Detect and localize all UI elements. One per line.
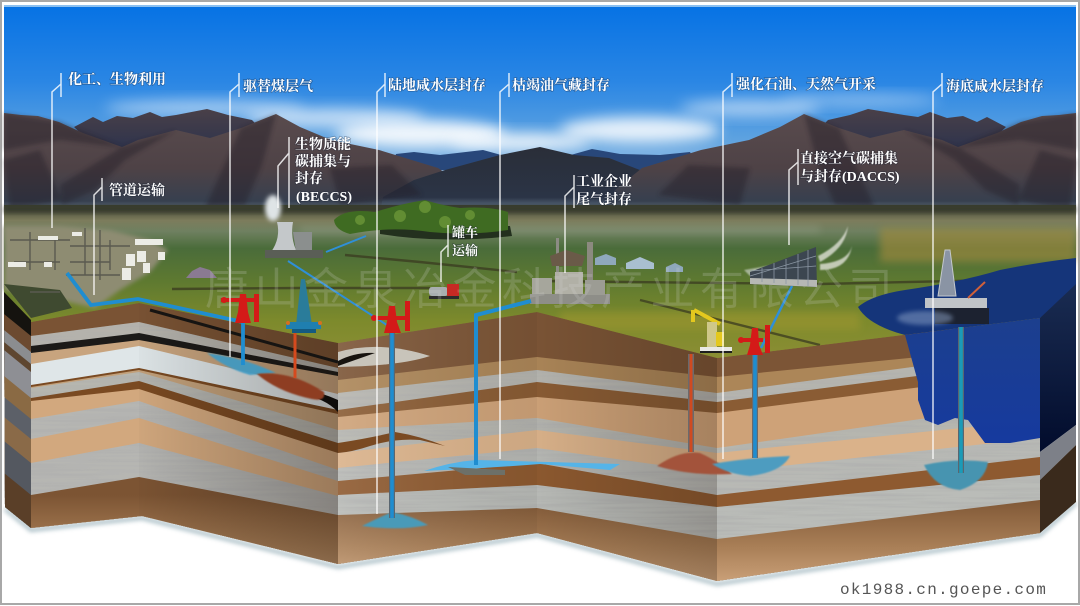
label: 管道运输 [94, 178, 165, 295]
label: 化工、生物利用 [52, 71, 166, 228]
ground plain [4, 205, 1076, 360]
well: depleted reservoir [476, 301, 531, 465]
label: 强化石油、天然气开采 [723, 73, 876, 459]
label: 管道运输: 管道运输 [109, 182, 165, 199]
label: BECCS: 碳捕集与 [295, 153, 351, 170]
label: 驱替煤层气: 驱替煤层气 [243, 78, 313, 95]
label: 枯竭油气藏封存: 枯竭油气藏封存 [512, 77, 610, 94]
label: BECCS [278, 136, 352, 208]
CO2 pipeline from refinery [67, 273, 243, 365]
CO2 transport lines [288, 236, 792, 348]
label: 直接空气碳捕集与封存 [789, 149, 900, 245]
center dark mountain [380, 147, 700, 212]
label: BECCS: 生物质能 [295, 136, 351, 153]
tanker truck [429, 284, 459, 299]
left front strata [31, 303, 338, 564]
label: 罐车运输: 运输 [452, 243, 478, 258]
label: 直接空气碳捕集与封存: 直接空气碳捕集 [800, 150, 898, 167]
ocean surface [858, 258, 1076, 335]
village houses [550, 250, 683, 272]
label: BECCS: 封存 [295, 170, 323, 187]
reservoir: sea saline aquifer [924, 461, 988, 490]
shadow facets [4, 113, 1076, 210]
clouds [105, 94, 940, 151]
tent building [186, 267, 217, 278]
well: coal bed [294, 333, 296, 378]
watermark: 唐山金泉冶金科技产业有限公司 [205, 265, 898, 314]
reservoir: saline aquifer land [362, 512, 428, 528]
back right ridge [780, 109, 1006, 170]
back left ridge [74, 109, 300, 170]
label: 海底咸水层封存 [933, 73, 1044, 459]
label: 驱替煤层气 [230, 73, 313, 357]
distant snow mountains [390, 149, 700, 170]
label: 工业企业尾气封存: 工业企业 [576, 173, 632, 190]
website caption: ok1988.cn.goepe.com [840, 581, 1047, 599]
right end face [1040, 284, 1076, 533]
label: BECCS: (BECCS) [296, 190, 352, 205]
front right range [605, 113, 1076, 214]
wells and pipelines [67, 273, 961, 518]
well: enhanced gas blue [752, 355, 758, 458]
geological block [4, 284, 1076, 600]
label: 陆地咸水层封存: 陆地咸水层封存 [388, 77, 486, 94]
mountains [4, 109, 1076, 214]
cooling tower BECCS [265, 195, 323, 258]
label: 陆地咸水层封存 [377, 73, 486, 514]
left end face [4, 290, 32, 540]
wellhead 3 [738, 325, 770, 355]
reservoir: red coal [257, 373, 324, 400]
label: 强化石油、天然气开采: 强化石油、天然气开采 [736, 76, 876, 93]
label: 工业企业尾气封存 [565, 173, 632, 273]
label: 罐车运输 [441, 225, 478, 282]
label: 海底咸水层封存: 海底咸水层封存 [946, 78, 1044, 95]
bottom shadow [5, 503, 1076, 584]
pumpjack [693, 310, 732, 353]
sky [4, 5, 1076, 175]
offshore rig [897, 250, 989, 325]
tree patch [334, 200, 512, 240]
refinery complex [4, 226, 168, 318]
wellhead 2 [371, 301, 410, 333]
industrial plant [530, 238, 610, 304]
label: 罐车运输: 罐车 [452, 225, 478, 240]
well: land saline [389, 333, 395, 518]
reservoir: enhanced oil red [657, 453, 732, 474]
well: enhanced oil red [688, 354, 694, 452]
storage reservoirs [207, 353, 988, 528]
reservoir: coal seam blue [207, 353, 276, 375]
right front strata [338, 310, 1040, 600]
derrick with platform [286, 279, 322, 333]
well: offshore [958, 327, 964, 473]
direct air capture unit [744, 226, 852, 287]
label: 化工、生物利用: 化工、生物利用 [68, 71, 166, 88]
sea cross-section [905, 318, 1040, 443]
label: 枯竭油气藏封存 [500, 73, 610, 459]
label: 直接空气碳捕集与封存: 与封存(DACCS) [800, 168, 900, 185]
front left range [4, 113, 480, 214]
label: 工业企业尾气封存: 尾气封存 [576, 191, 632, 208]
reservoir: enhanced oil blue [712, 456, 790, 476]
reservoir: depleted gas field [424, 460, 620, 475]
wellhead 1 [221, 294, 259, 323]
